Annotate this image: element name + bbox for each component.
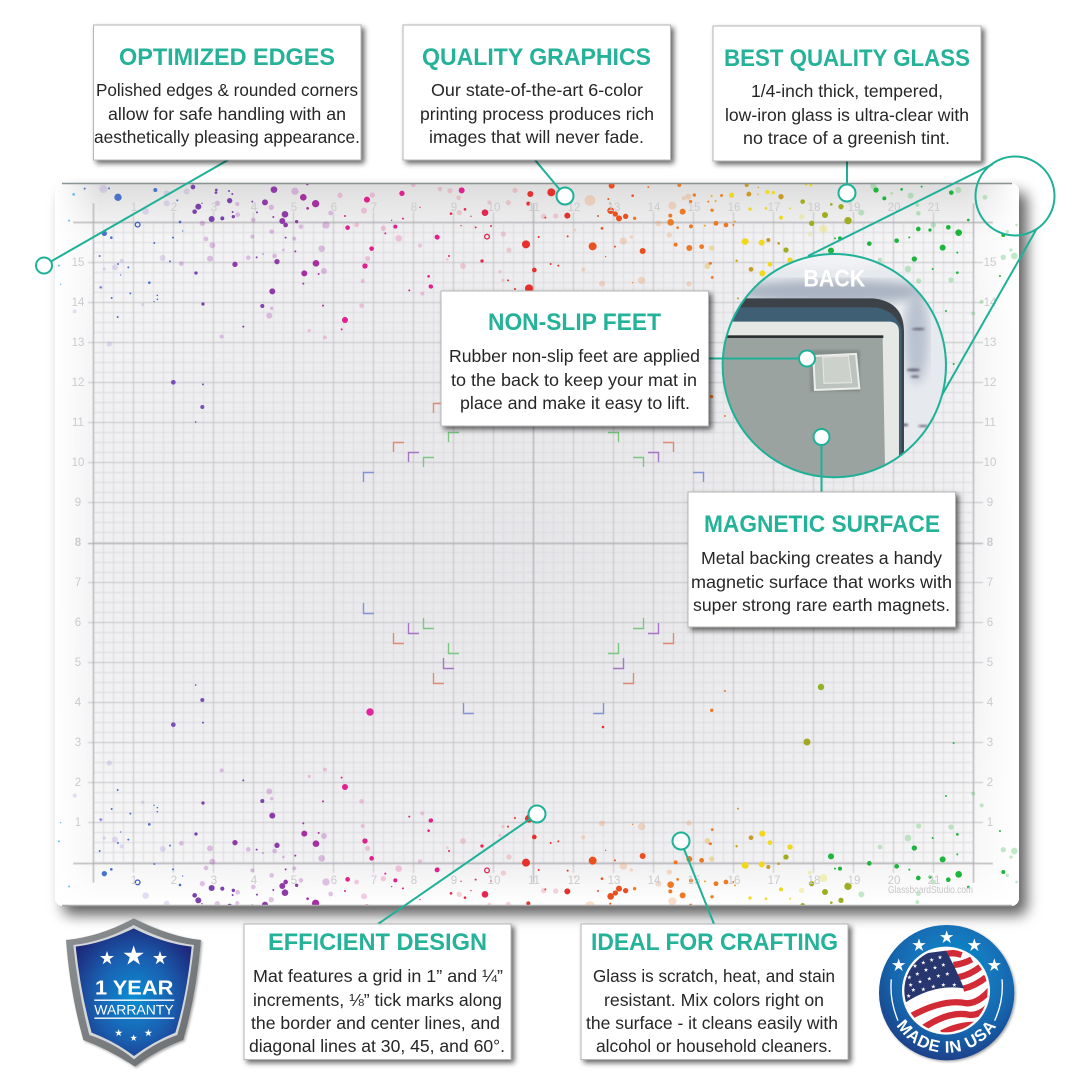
- left ruler numbers: 10: [72, 457, 84, 469]
- paint splatter top: [58, 182, 1018, 423]
- bottom ruler numbers: 12: [568, 875, 580, 887]
- body: magnetic surface: Metal backing creates a handy: [701, 548, 942, 568]
- body: ideal for crafting: the surface - it cleans easily with: [586, 1013, 838, 1033]
- left ruler numbers: 14: [72, 297, 85, 309]
- right ruler numbers: 9: [987, 497, 993, 509]
- top ruler numbers: 11: [528, 202, 540, 214]
- right ruler numbers: 4: [987, 697, 994, 709]
- right ruler numbers: 15: [984, 257, 996, 269]
- bottom ruler numbers: 2: [171, 875, 177, 887]
- leader line: best quality glass: [838, 161, 856, 202]
- bottom ruler numbers: [132, 876, 940, 884]
- leader line: ideal for crafting: [672, 832, 714, 924]
- top ruler numbers: 12: [568, 202, 580, 214]
- body: efficient design: Mat features a grid in 1” and ¼”: [253, 966, 503, 986]
- body: quality graphics: printing process produces rich: [420, 104, 654, 124]
- top ruler numbers: 4: [251, 202, 258, 214]
- bottom ruler numbers: 19: [848, 875, 860, 887]
- right ruler numbers: 10: [984, 457, 996, 469]
- body: non-slip feet: [449, 346, 700, 413]
- top ruler numbers: 14: [648, 202, 661, 214]
- top ruler numbers: 16: [728, 202, 740, 214]
- body: magnetic surface: magnetic surface that works with: [691, 572, 952, 592]
- left ruler numbers: 2: [75, 777, 81, 789]
- heading: efficient design: EFFICIENT DESIGN: [268, 929, 487, 956]
- magnifier: back of the board: [720, 248, 950, 483]
- body: efficient design: increments, ⅛” tick marks along: [253, 990, 502, 1010]
- body: best quality glass: no trace of a greenish tint.: [743, 128, 950, 148]
- bottom ruler numbers: 16: [728, 875, 740, 887]
- body: ideal for crafting: [586, 966, 838, 1056]
- body: magnetic surface: super strong rare earth magnets.: [693, 595, 950, 615]
- top ruler numbers: 7: [371, 202, 377, 214]
- panel: magnetic surface: [688, 492, 956, 627]
- top ruler numbers: 15: [688, 202, 700, 214]
- body: ideal for crafting: alcohol or household cleaners.: [596, 1036, 832, 1056]
- body: efficient design: [249, 966, 505, 1056]
- left ruler numbers: 7: [75, 577, 81, 589]
- top ruler numbers: 1: [131, 202, 137, 214]
- leader line: quality graphics: [535, 160, 574, 204]
- left ruler numbers: 8: [75, 537, 82, 549]
- body: quality graphics: Our state-of-the-art 6-color: [431, 80, 643, 100]
- heading: quality graphics: QUALITY GRAPHICS: [422, 44, 651, 71]
- bottom ruler numbers: 4: [251, 875, 258, 887]
- left ruler numbers: 1: [75, 817, 81, 829]
- right ruler numbers: 12: [984, 377, 996, 389]
- left ruler numbers: 12: [72, 377, 84, 389]
- badge: 1 year warranty shield: WARRANTY: [94, 1002, 174, 1017]
- heading: ideal for crafting: IDEAL FOR CRAFTING: [591, 929, 838, 956]
- right ruler numbers: 8: [987, 537, 994, 549]
- body: best quality glass: low-iron glass is ultra-clear with: [725, 105, 969, 125]
- leader line: non-slip feet: [708, 350, 815, 366]
- body: optimized edges: aesthetically pleasing appearance.: [94, 127, 360, 147]
- bottom ruler numbers: 9: [451, 875, 457, 887]
- left ruler numbers: 9: [75, 497, 81, 509]
- body: ideal for crafting: resistant. Mix colors right on: [604, 990, 824, 1010]
- top ruler numbers: 9: [451, 202, 457, 214]
- heading: magnetic surface: MAGNETIC SURFACE: [704, 511, 940, 538]
- leader line: magnetic surface: [814, 429, 830, 492]
- heading: non-slip feet: NON-SLIP FEET: [488, 309, 661, 336]
- zoom callout lines and corner loupe: [808, 156, 1054, 395]
- panel: ideal for crafting: [581, 924, 848, 1060]
- bottom ruler numbers: 8: [411, 875, 417, 887]
- top ruler numbers: 17: [768, 202, 780, 214]
- right ruler numbers: 6: [987, 617, 993, 629]
- diagonal corner marks: [364, 404, 704, 714]
- bottom ruler numbers: 21: [928, 875, 940, 887]
- heading: best quality glass: BEST QUALITY GLASS: [724, 45, 970, 72]
- label: back: BACK: [803, 266, 866, 293]
- body: non-slip feet: Rubber non-slip feet are applied: [449, 346, 700, 366]
- top ruler numbers: 20: [888, 202, 900, 214]
- panel: optimized edges: [94, 25, 361, 160]
- badge: made in USA seal: [878, 924, 1018, 1064]
- panel: non-slip feet: [441, 291, 708, 426]
- panel: best quality glass: [713, 26, 981, 161]
- paint splatter bottom: [58, 684, 1018, 925]
- left ruler numbers: 11: [72, 417, 84, 429]
- top ruler numbers: 6: [331, 202, 337, 214]
- body: non-slip feet: place and make it easy to lift.: [460, 393, 690, 413]
- body: optimized edges: [94, 80, 360, 147]
- bottom ruler numbers: 15: [688, 875, 700, 887]
- right ruler numbers: [984, 258, 996, 826]
- right ruler numbers: 5: [987, 657, 993, 669]
- bottom ruler numbers: 6: [331, 875, 337, 887]
- right ruler numbers: 3: [987, 737, 993, 749]
- body: quality graphics: images that will never fade.: [429, 127, 644, 147]
- bottom ruler numbers: 5: [291, 875, 297, 887]
- badge: 1 year warranty shield: [66, 918, 201, 1067]
- left ruler numbers: [72, 258, 84, 826]
- top ruler numbers: 3: [211, 202, 217, 214]
- body: efficient design: diagonal lines at 30, 45, and 60°.: [249, 1036, 505, 1056]
- top ruler numbers: [132, 202, 940, 211]
- bottom ruler numbers: 14: [648, 875, 661, 887]
- bottom ruler numbers: 10: [488, 875, 500, 887]
- extra paint dots in lower field: [366, 684, 824, 746]
- left ruler numbers: 6: [75, 617, 81, 629]
- badge: made in USA seal: MADE IN USA: [896, 1019, 996, 1053]
- panel: efficient design: [244, 924, 511, 1060]
- heading: optimized edges: OPTIMIZED EDGES: [119, 44, 335, 71]
- right ruler numbers: 7: [987, 577, 993, 589]
- right ruler numbers: 14: [984, 297, 997, 309]
- bottom ruler numbers: 18: [808, 875, 820, 887]
- top ruler numbers: 21: [928, 202, 940, 214]
- left ruler numbers: 4: [75, 697, 82, 709]
- bottom ruler numbers: 1: [131, 875, 137, 887]
- badge: 1 year warranty shield: 1 YEAR: [95, 976, 173, 999]
- top ruler numbers: 19: [848, 202, 860, 214]
- left ruler numbers: 3: [75, 737, 81, 749]
- right ruler numbers: 11: [984, 417, 996, 429]
- body: quality graphics: [420, 80, 654, 147]
- body: optimized edges: allow for safe handling with an: [108, 104, 346, 124]
- top ruler numbers: 2: [171, 202, 177, 214]
- left ruler numbers: 13: [72, 337, 84, 349]
- glass cutting mat board: [55, 182, 1019, 925]
- bottom ruler numbers: 13: [608, 875, 620, 887]
- body: efficient design: the border and center lines, and: [251, 1013, 500, 1033]
- top ruler numbers: 13: [608, 202, 620, 214]
- body: best quality glass: [725, 81, 969, 148]
- left ruler numbers: 15: [72, 257, 84, 269]
- bottom ruler numbers: 20: [888, 875, 900, 887]
- bottom ruler numbers: 17: [768, 875, 780, 887]
- leader line: efficient design: [378, 806, 546, 924]
- top ruler numbers: 10: [488, 202, 500, 214]
- body: optimized edges: Polished edges & rounded corners: [96, 80, 358, 100]
- right ruler numbers: 13: [984, 337, 996, 349]
- top ruler numbers: 5: [291, 202, 297, 214]
- body: ideal for crafting: Glass is scratch, heat, and stain: [593, 966, 835, 986]
- left ruler numbers: 5: [75, 657, 81, 669]
- leader line: optimized edges: [36, 160, 228, 274]
- body: best quality glass: 1/4-inch thick, tempered,: [751, 81, 943, 101]
- bottom ruler numbers: 3: [211, 875, 217, 887]
- body: magnetic surface: [691, 548, 952, 615]
- right ruler numbers: 1: [987, 817, 993, 829]
- top ruler numbers: 18: [808, 202, 820, 214]
- bottom ruler numbers: 7: [371, 875, 377, 887]
- right ruler numbers: 2: [987, 777, 993, 789]
- website mark: GlassboardStudio.com: [888, 885, 973, 896]
- top ruler numbers: 8: [411, 202, 417, 214]
- bottom ruler numbers: 11: [528, 875, 540, 887]
- body: non-slip feet: to the back to keep your mat in: [451, 370, 697, 390]
- panel: quality graphics: [403, 25, 670, 160]
